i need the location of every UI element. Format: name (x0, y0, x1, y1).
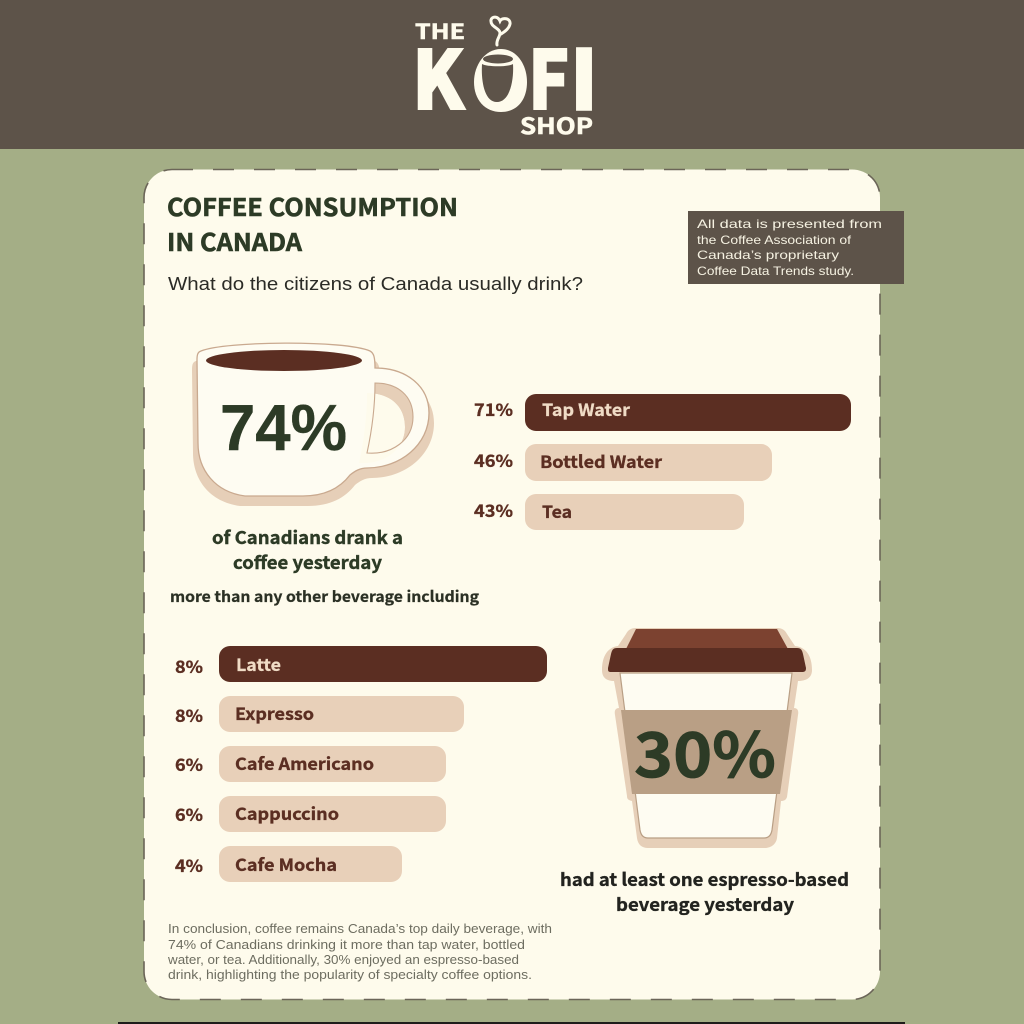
bar chart: coffee drinks: 4% (175, 852, 203, 877)
subtitle: What do the citizens of Canada usually drink? (168, 273, 583, 294)
bar chart: other beverages (474, 394, 851, 530)
text: conclusion: In conclusion, coffee remains Canada’s top daily beverage, with (168, 922, 552, 936)
bar chart: coffee drinks: Cafe Americano (235, 750, 374, 775)
bar chart: other beverages: Tap Water (542, 396, 631, 421)
bar chart: other beverages: 71% (474, 396, 513, 421)
bottom rule (118, 1022, 905, 1024)
text: conclusion: drink, highlighting the popularity of specialty coffee options. (168, 968, 532, 982)
title (167, 189, 458, 259)
callout: 74% caption: of Canadians drank a (212, 525, 403, 550)
source note box: Coffee Data Trends study. (697, 264, 854, 278)
icon: coffee mug with 74% (192, 343, 434, 506)
bar chart: coffee drinks (175, 646, 547, 882)
bar chart: other beverages: Bottled Water (540, 448, 663, 473)
panel: main card (144, 170, 904, 1000)
source note box: the Coffee Association of (697, 233, 852, 247)
bar chart: coffee drinks: 8% (175, 653, 203, 678)
bar chart: coffee drinks: Expresso (235, 700, 314, 725)
text: conclusion: 74% of Canadians drinking it more than tap water, bottled (168, 938, 525, 952)
source note box: Canada’s proprietary (697, 248, 839, 262)
callout: 74% caption: coffee yesterday (233, 550, 382, 575)
callout: 74% caption (212, 525, 403, 575)
bar chart: other beverages: 43% (474, 497, 513, 522)
bar chart: coffee drinks: 6% (175, 751, 203, 776)
header band with logo (0, 0, 1024, 149)
bar chart: coffee drinks: Cappuccino (235, 800, 339, 825)
bar chart: coffee drinks: Latte (236, 651, 281, 676)
bar chart: coffee drinks: 6% (175, 801, 203, 826)
bar chart: other beverages: 46% (474, 447, 513, 472)
title: COFFEE CONSUMPTION (167, 189, 458, 224)
logo: The Kofi Shop: SHOP (520, 109, 593, 141)
callout: 30% caption: had at least one espresso-based (560, 867, 849, 892)
callout: 30% caption: beverage yesterday (616, 892, 794, 917)
logo: The Kofi Shop: THE (415, 16, 465, 46)
text: conclusion: water, or tea. Additionally, 30% enjoyed an espresso-based (167, 953, 519, 967)
logo: The Kofi Shop: K (413, 19, 463, 131)
logo: The Kofi Shop: I (572, 19, 596, 131)
text: beverage comparison lead-in: more than any other beverage including (170, 586, 479, 607)
logo: The Kofi Shop (413, 16, 596, 141)
source note box: All data is presented from (697, 217, 882, 231)
callout: 30% caption (560, 867, 849, 917)
logo: The Kofi Shop: F (529, 19, 568, 131)
bar chart: coffee drinks: Cafe Mocha (235, 851, 337, 876)
icon: takeaway cup with 30%: 30% (634, 705, 776, 795)
title: IN CANADA (167, 224, 302, 259)
bar chart: coffee drinks: 8% (175, 702, 203, 727)
bar chart: other beverages: Tea (542, 498, 572, 523)
text: conclusion (167, 922, 552, 982)
source note box (688, 211, 904, 284)
icon: coffee mug with 74%: 74% (220, 391, 347, 464)
icon: takeaway cup with 30% (602, 628, 812, 848)
